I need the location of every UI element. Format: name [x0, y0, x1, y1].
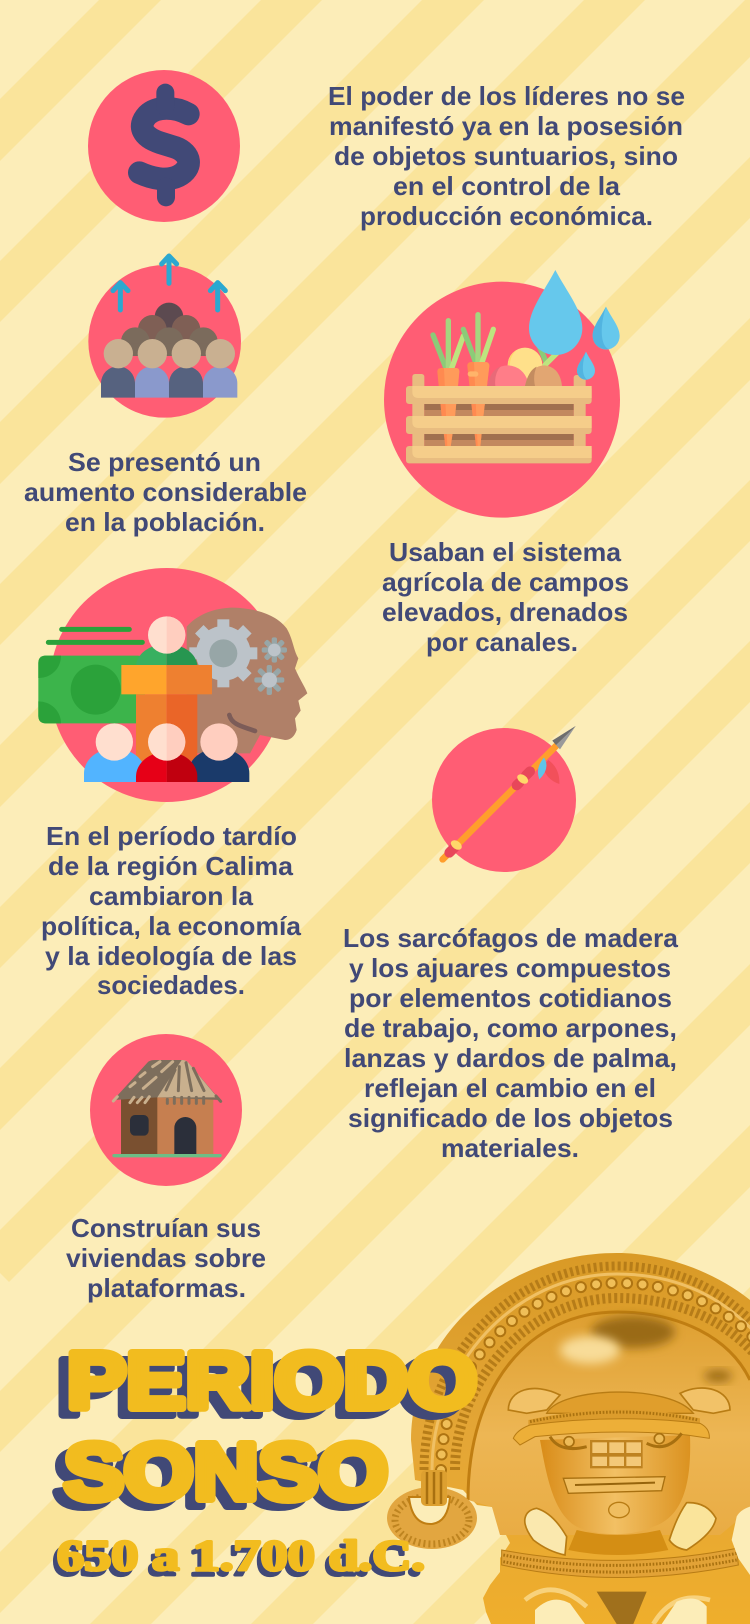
text: periodo tardio: política, la economía — [41, 911, 302, 941]
text: sarcofagos: materiales. — [441, 1133, 579, 1163]
text: el poder de los lideres: producción económica. — [360, 201, 653, 231]
text: sistema agricola: Usaban el sistema — [389, 537, 622, 567]
icon: dollar circle — [88, 70, 240, 222]
text: el poder de los lideres: en el control de la — [393, 171, 621, 201]
text: periodo tardio: En el período tardío — [46, 821, 297, 851]
text: sarcofagos — [343, 923, 679, 1163]
text: sistema agricola — [382, 537, 629, 657]
text: aumento de poblacion — [24, 447, 307, 537]
title shadow: PERIODO — [57, 1343, 467, 1432]
text: el poder de los lideres: El poder de los líderes no se — [328, 81, 685, 111]
text: sarcofagos: y los ajuares compuestos — [349, 953, 671, 983]
text: viviendas: viviendas sobre — [66, 1243, 266, 1273]
title front: SONSO — [64, 1427, 388, 1516]
text: sarcofagos: reflejan el cambio en el — [364, 1073, 656, 1103]
text: el poder de los lideres — [328, 81, 685, 231]
text: aumento de poblacion: en la población. — [65, 507, 265, 537]
text: sarcofagos: de trabajo, como arpones, — [344, 1013, 677, 1043]
text: periodo tardio: sociedades. — [97, 970, 245, 1000]
icon: growing population — [88, 256, 241, 418]
text: periodo tardio: de la región Calima — [48, 851, 294, 881]
text: periodo tardio: y la ideología de las — [45, 941, 297, 971]
text: periodo tardio: cambiaron la — [89, 881, 254, 911]
text: aumento de poblacion: aumento considerable — [24, 477, 307, 507]
text: el poder de los lideres: de objetos suntuarios, sino — [334, 141, 678, 171]
icon: crate with vegetables and water drops — [384, 270, 620, 518]
text: viviendas: Construían sus — [71, 1213, 261, 1243]
illustration: gold figure — [387, 1253, 750, 1624]
text: viviendas — [66, 1213, 266, 1303]
text: sarcofagos: lanzas y dardos de palma, — [344, 1043, 677, 1073]
icon: spear — [432, 726, 576, 872]
text: sarcofagos: Los sarcófagos de madera — [343, 923, 679, 953]
date: 650 a 1.700 d.C.: 650 a 1.700 d.C. — [53, 1538, 421, 1585]
text: aumento de poblacion: Se presentó un — [68, 447, 261, 477]
text: periodo tardio — [41, 821, 302, 1000]
icon: hut — [90, 1034, 242, 1186]
title shadow: SONSO — [54, 1434, 378, 1523]
text: sistema agricola: por canales. — [426, 627, 578, 657]
title front — [64, 1336, 477, 1516]
text: sistema agricola: elevados, drenados — [382, 597, 628, 627]
title: periodo sonso — [54, 1336, 477, 1523]
text: viviendas: plataformas. — [87, 1273, 246, 1303]
date: 650 a 1.700 d.C.: 650 a 1.700 d.C. — [57, 1533, 425, 1580]
title front: PERIODO — [67, 1336, 477, 1425]
title shadow — [54, 1343, 467, 1523]
text: sarcofagos: por elementos cotidianos — [349, 983, 672, 1013]
text: sarcofagos: significado de los objetos — [348, 1103, 673, 1133]
text: sistema agricola: agrícola de campos — [382, 567, 629, 597]
icon: politics economy ideology — [38, 568, 307, 802]
text: el poder de los lideres: manifestó ya en la posesión — [329, 111, 683, 141]
